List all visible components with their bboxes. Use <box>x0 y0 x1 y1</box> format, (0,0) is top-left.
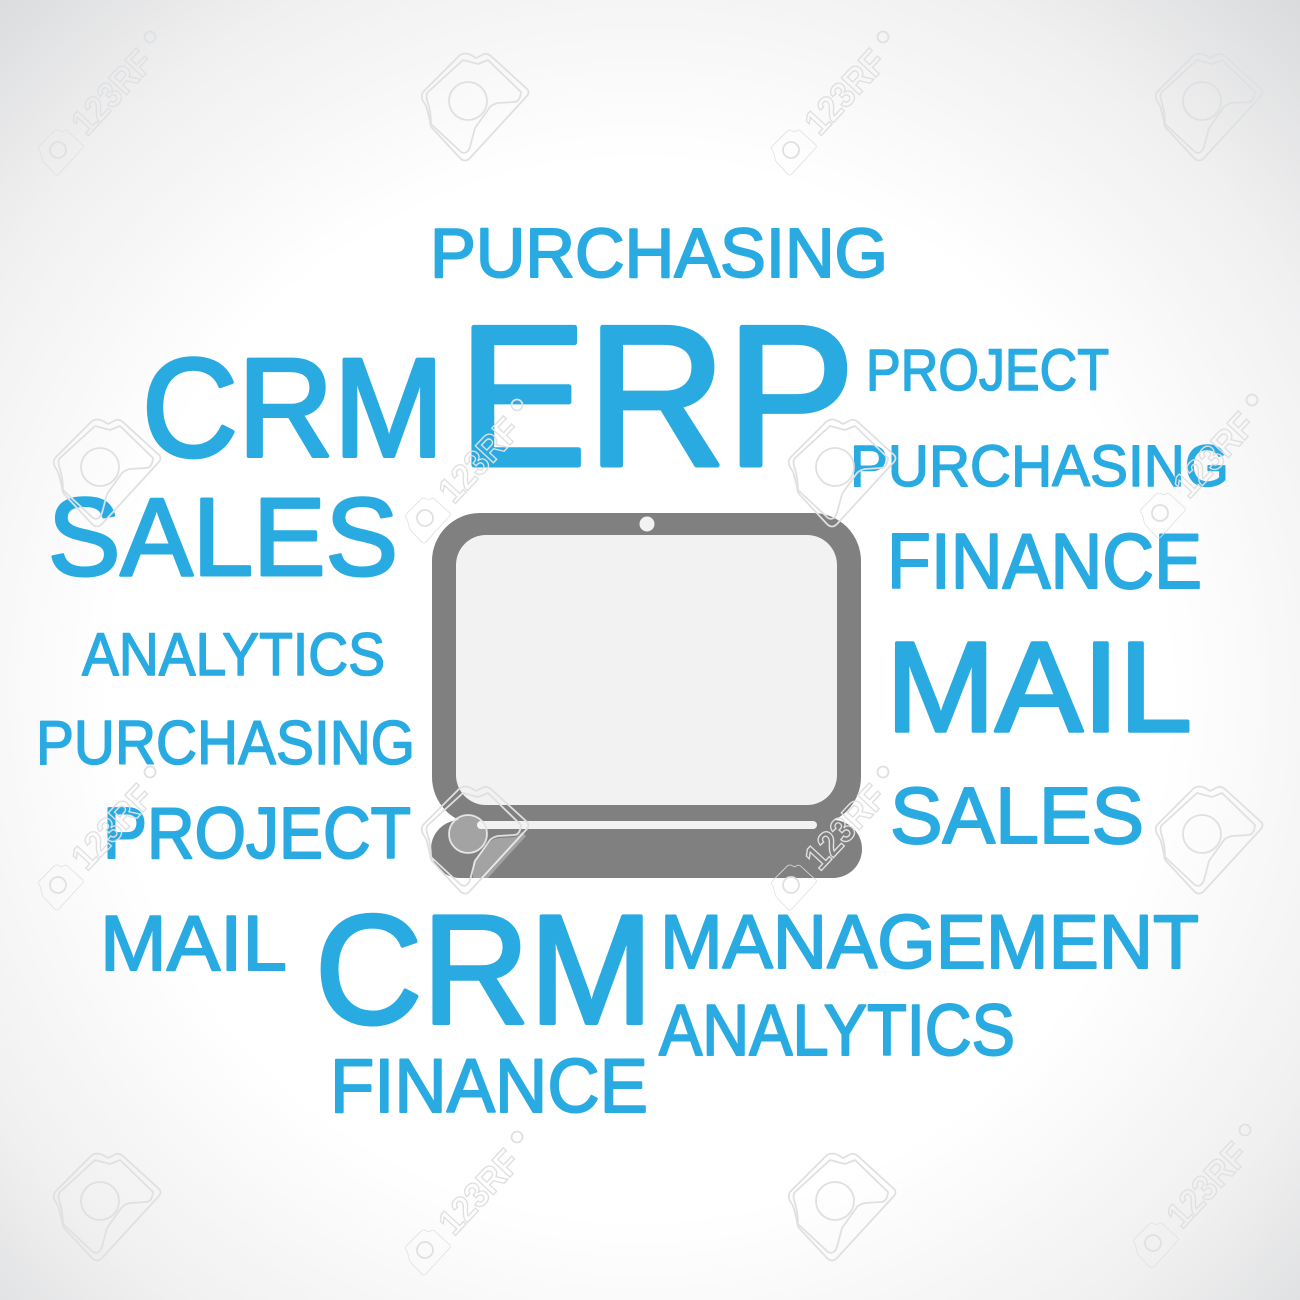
word: PURCHASING right: PURCHASING <box>850 434 1229 499</box>
watermark row 1: 123RF <box>63 41 161 142</box>
watermark highlight over laptop <box>449 815 526 878</box>
word: CRM upper: CRM <box>142 329 444 486</box>
word: ERP: ERP <box>458 285 855 508</box>
laptop camera <box>640 516 654 532</box>
watermark row 4 <box>54 1124 1256 1275</box>
word: ANALYTICS lower: ANALYTICS <box>659 991 1015 1071</box>
watermark row 4: 123RF <box>1158 1134 1256 1235</box>
word: FINANCE lower: FINANCE <box>330 1044 648 1129</box>
laptop icon <box>431 513 862 878</box>
laptop base <box>431 820 862 878</box>
watermark row 2 <box>54 394 1263 543</box>
laptop body <box>432 513 861 825</box>
laptop screen <box>456 535 837 805</box>
watermark row 3: 123RF <box>796 776 894 877</box>
word: PROJECT right: PROJECT <box>866 338 1109 403</box>
watermark row 4: 123RF <box>430 1141 528 1242</box>
word: MAIL right: MAIL <box>886 616 1192 759</box>
word: MANAGEMENT: MANAGEMENT <box>660 900 1199 985</box>
word: PROJECT left: PROJECT <box>103 794 411 874</box>
word: ANALYTICS left: ANALYTICS <box>82 621 385 688</box>
watermark row 3 <box>39 766 1262 910</box>
watermark row 3: 123RF <box>63 776 161 877</box>
word: MAIL left: MAIL <box>100 899 287 987</box>
word: FINANCE right: FINANCE <box>887 517 1202 605</box>
word: CRM lower: CRM <box>315 883 653 1056</box>
watermark row 2: 123RF <box>430 409 528 510</box>
laptop hinge line <box>477 821 817 829</box>
word: SALES left: SALES <box>48 476 398 599</box>
watermark row 1 <box>39 32 1262 175</box>
word: PURCHASING left: PURCHASING <box>36 709 415 778</box>
word: PURCHASING top: PURCHASING <box>430 214 888 292</box>
word: SALES right: SALES <box>890 771 1144 860</box>
watermark row 1: 123RF <box>796 41 894 142</box>
watermark row 2: 123RF <box>1165 404 1263 505</box>
